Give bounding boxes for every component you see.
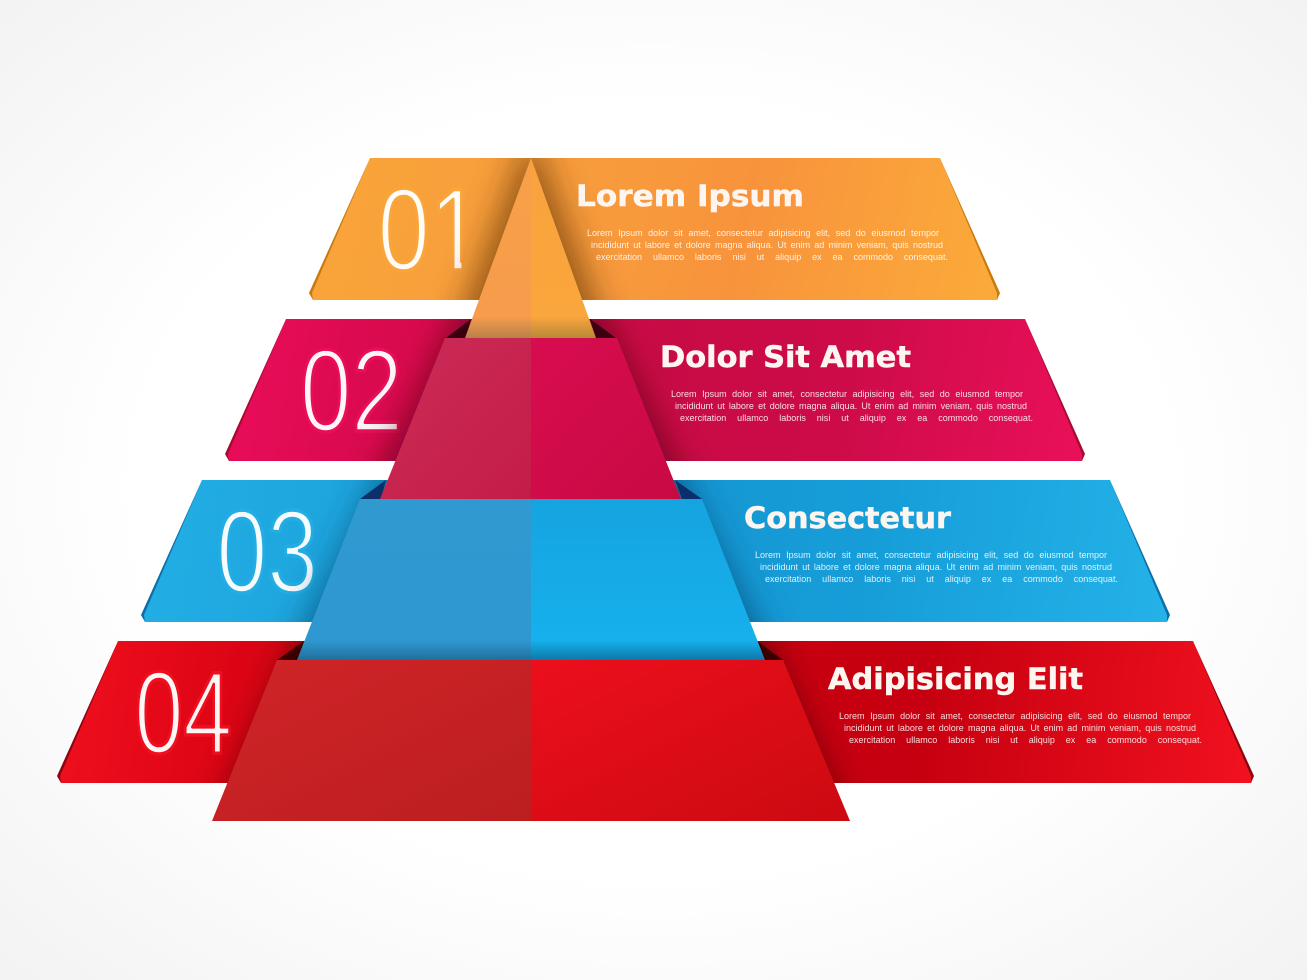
band 01 body text: exercitation ullamco laboris nisi ut aliquip ex ea commodo consequat. <box>596 252 948 262</box>
band 02 body text: exercitation ullamco laboris nisi ut aliquip ex ea commodo consequat. <box>680 413 1033 423</box>
band 04 body text: Lorem Ipsum dolor sit amet, consectetur adipisicing elit, sed do eiusmod tempor <box>839 711 1191 721</box>
panel: band 03 <box>141 480 1170 622</box>
band 03 fold wedges <box>360 480 702 499</box>
band 04 pyramid shadow <box>206 641 858 783</box>
chart: central pyramid <box>212 158 850 821</box>
band 01 body text: Lorem Ipsum dolor sit amet, consectetur adipisicing elit, sed do eiusmod tempor <box>587 228 939 238</box>
band 02 body text: Lorem Ipsum dolor sit amet, consectetur adipisicing elit, sed do eiusmod tempor <box>671 389 1023 399</box>
band 03 body text: incididunt ut labore et dolore magna aliqua. Ut enim ad minim veniam, quis nostrud <box>760 562 1112 572</box>
band 03 heading: Consectetur <box>744 501 952 535</box>
panel: band 01 <box>309 158 1000 300</box>
band 03 body text: exercitation ullamco laboris nisi ut aliquip ex ea commodo consequat. <box>765 574 1118 584</box>
band 02 fold wedges <box>446 319 616 338</box>
pyramid tier 3 <box>297 499 765 660</box>
band 01 pyramid shadow <box>444 158 618 300</box>
band 03 pyramid shadow <box>284 480 776 622</box>
band 01 body text <box>587 228 948 262</box>
band 04 body text <box>839 711 1202 745</box>
band 02 heading: Dolor Sit Amet <box>660 340 911 374</box>
band 01 side edges <box>309 158 1000 300</box>
pyramid tier 1 <box>465 158 596 338</box>
band 03 face <box>144 480 1167 622</box>
number 02: 02 <box>300 327 403 457</box>
pyramid tier 4 <box>212 660 850 821</box>
number 01: 01 <box>378 165 482 295</box>
band 04 body text: incididunt ut labore et dolore magna aliqua. Ut enim ad minim veniam, quis nostrud <box>844 723 1196 733</box>
band 02 side edges <box>225 319 1085 461</box>
panel: band 04 <box>57 641 1254 783</box>
pyramid tier 2 <box>380 338 681 499</box>
band 01 heading: Lorem Ipsum <box>576 179 804 213</box>
band 02 body text: incididunt ut labore et dolore magna aliqua. Ut enim ad minim veniam, quis nostrud <box>675 401 1027 411</box>
band 03 side edges <box>141 480 1170 622</box>
band 04 side edges <box>57 641 1254 783</box>
band 03 body text <box>755 550 1118 584</box>
number 04: 04 <box>134 647 232 778</box>
band 02 body text <box>671 389 1033 423</box>
band 01 body text: incididunt ut labore et dolore magna aliqua. Ut enim ad minim veniam, quis nostrud <box>591 240 943 250</box>
number 03: 03 <box>216 487 318 618</box>
panel: band 02 <box>225 319 1085 461</box>
band 04 face <box>60 641 1251 783</box>
band 01 face <box>312 158 997 300</box>
band 02 pyramid shadow <box>364 319 695 461</box>
band 03 body text: Lorem Ipsum dolor sit amet, consectetur adipisicing elit, sed do eiusmod tempor <box>755 550 1107 560</box>
band 02 face <box>228 319 1082 461</box>
band 04 fold wedges <box>277 641 783 660</box>
band 04 heading: Adipisicing Elit <box>828 662 1083 696</box>
band 04 body text: exercitation ullamco laboris nisi ut aliquip ex ea commodo consequat. <box>849 735 1202 745</box>
